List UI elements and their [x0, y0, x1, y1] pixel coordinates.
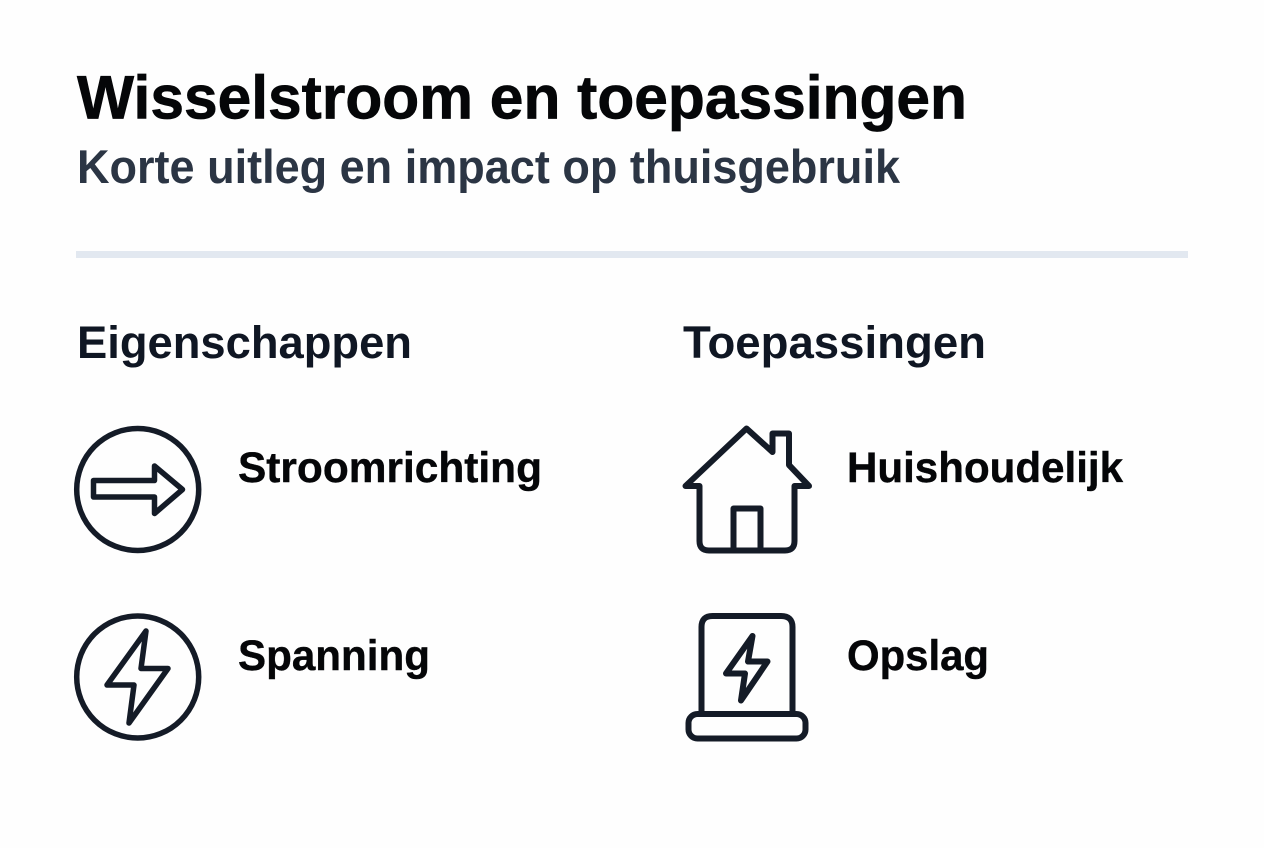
panel: toepassingen [683, 317, 1123, 738]
icon: lightning bolt in circle [77, 616, 199, 738]
label: huishoudelijk: Huishoudelijk [847, 444, 1123, 492]
heading: toepassingen: Toepassingen [683, 317, 986, 368]
label: stroomrichting: Stroomrichting [238, 444, 542, 492]
icon: battery storage [688, 616, 806, 738]
icon: house [686, 428, 809, 550]
icon: arrow in circle [77, 428, 199, 550]
label: spanning: Spanning [238, 632, 430, 680]
heading: eigenschappen: Eigenschappen [77, 317, 412, 368]
label: opslag: Opslag [847, 632, 989, 680]
panel: eigenschappen [77, 317, 542, 738]
title: Wisselstroom en toepassingen [77, 64, 967, 132]
item: huishoudelijk [686, 428, 1123, 550]
item: stroomrichting [77, 428, 542, 550]
item: opslag [688, 616, 989, 738]
subtitle: Korte uitleg en impact op thuisgebruik [77, 140, 901, 193]
item: spanning [77, 616, 430, 738]
